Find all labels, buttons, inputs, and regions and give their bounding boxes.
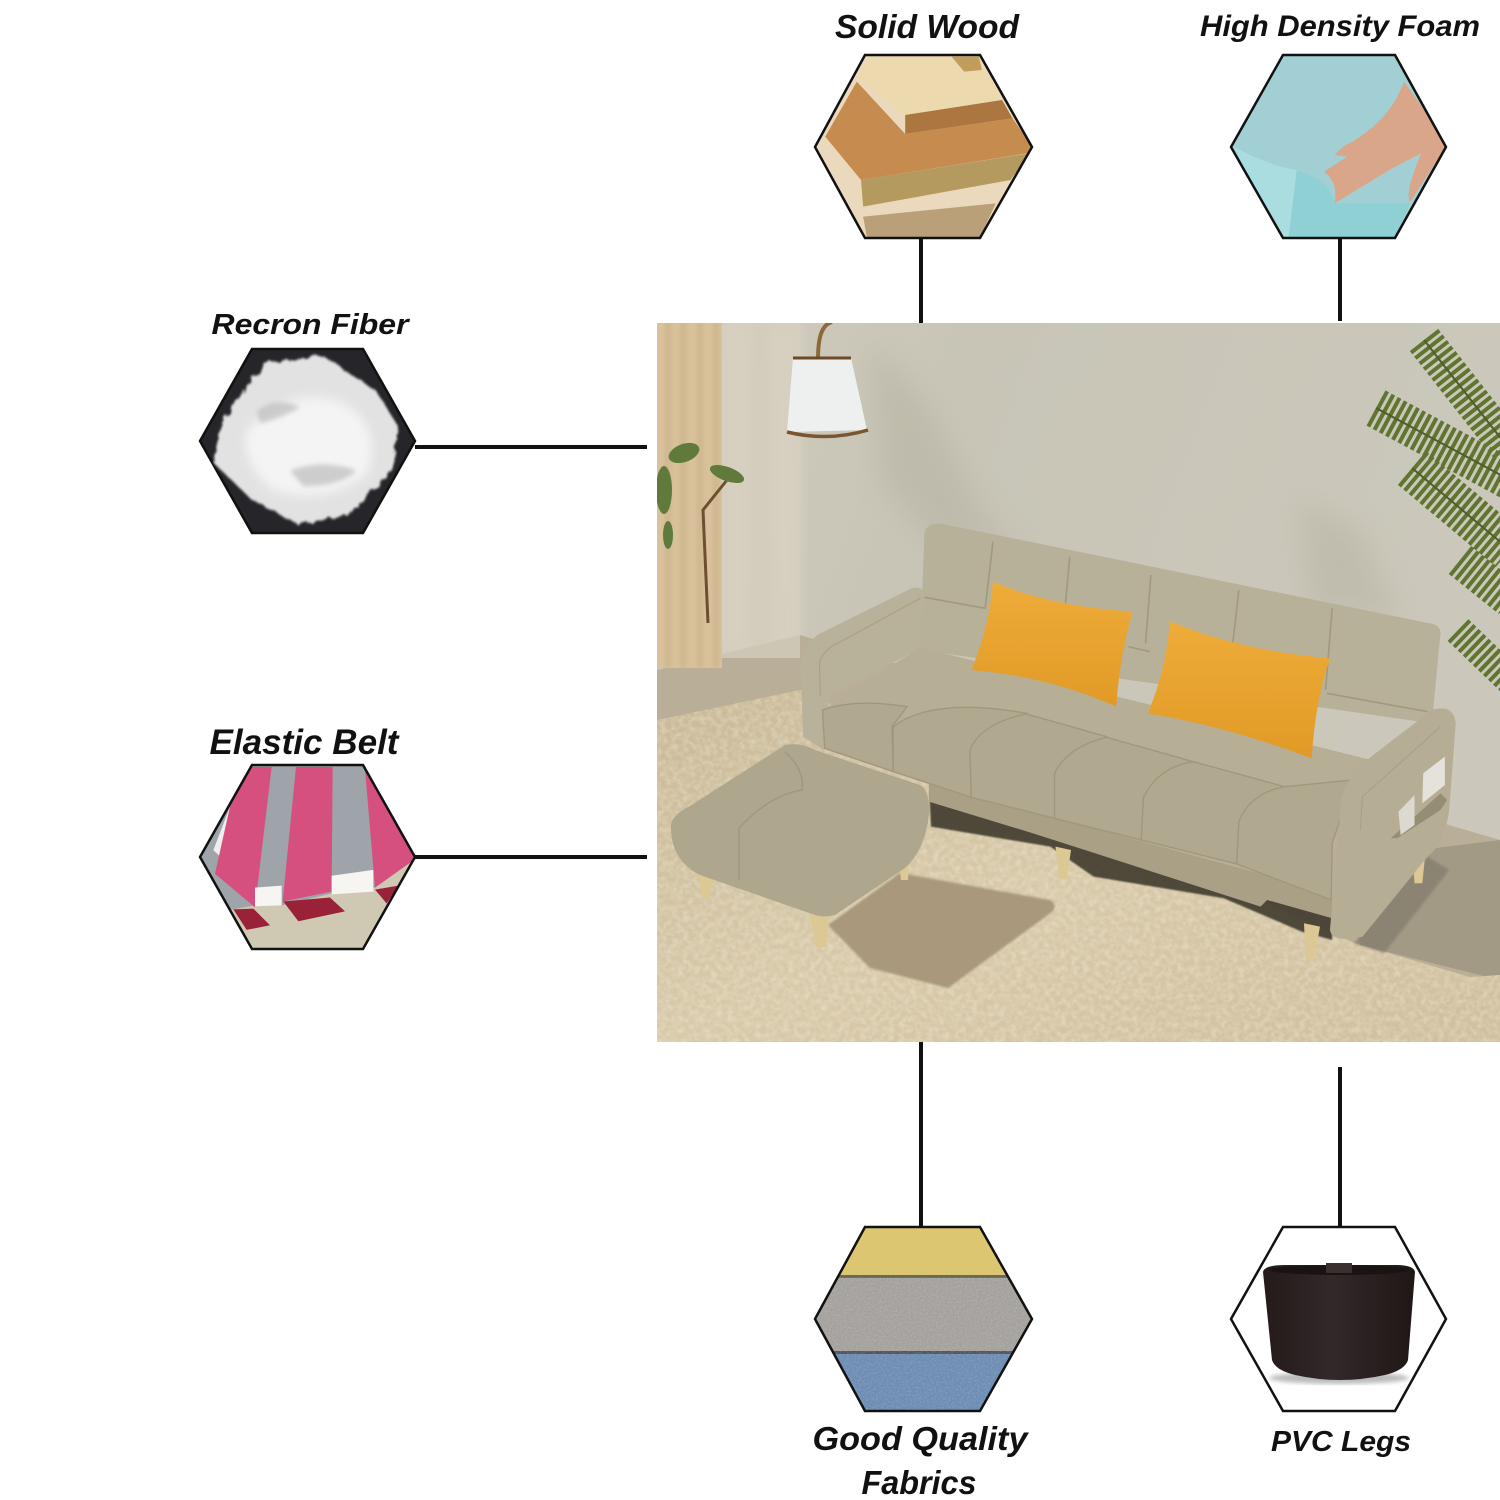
floor — [657, 635, 1500, 977]
icon: fabrics hexagon — [815, 1227, 1032, 1411]
icon: high density foam hexagon — [1231, 55, 1448, 240]
bottom rail — [929, 783, 1332, 918]
connector: recron fiber to sofa — [415, 445, 647, 449]
legs — [1055, 847, 1425, 961]
curtain — [657, 323, 800, 668]
central sofa photo — [656, 322, 1500, 1042]
connector: elastic belt to sofa — [415, 855, 647, 859]
icon: PVC legs hexagon — [1231, 1227, 1446, 1411]
front cushions — [823, 703, 1354, 900]
plant right — [1376, 340, 1500, 680]
connector: high density foam to sofa — [1338, 238, 1342, 321]
right arm with pocket — [1330, 708, 1456, 939]
heading: High Density Foam: High Density Foam — [1200, 10, 1480, 43]
floor lamp — [787, 322, 868, 437]
orange pillows — [971, 582, 1330, 758]
icon: recron fiber hexagon — [200, 349, 415, 533]
connector: PVC legs to sofa — [1338, 1067, 1342, 1227]
heading: Good Quality Fabrics: Good Quality — [812, 1420, 1029, 1457]
icon: elastic belt hexagon — [197, 763, 420, 953]
heading: Elastic Belt: Elastic Belt — [210, 723, 400, 762]
seat top — [828, 648, 1368, 784]
backrest — [920, 523, 1441, 723]
plant left — [656, 439, 746, 623]
heading: Solid Wood: Solid Wood — [835, 8, 1020, 45]
rug — [657, 690, 1500, 1042]
heading: Good Quality Fabrics — [812, 1420, 1029, 1500]
wall — [657, 323, 1500, 883]
heading: PVC Legs: PVC Legs — [1271, 1426, 1411, 1458]
icon: solid wood hexagon — [813, 53, 1036, 240]
left arm — [801, 588, 924, 750]
ottoman — [671, 744, 929, 947]
connector: fabrics to sofa — [919, 1042, 923, 1227]
heading: Recron Fiber: Recron Fiber — [212, 309, 410, 341]
sofa traced group — [801, 523, 1456, 961]
connector: solid wood to sofa — [919, 238, 923, 323]
heading: Good Quality Fabrics: Fabrics — [862, 1464, 976, 1500]
shadow under sofa — [930, 800, 1332, 940]
ottoman shadow — [828, 873, 1055, 988]
